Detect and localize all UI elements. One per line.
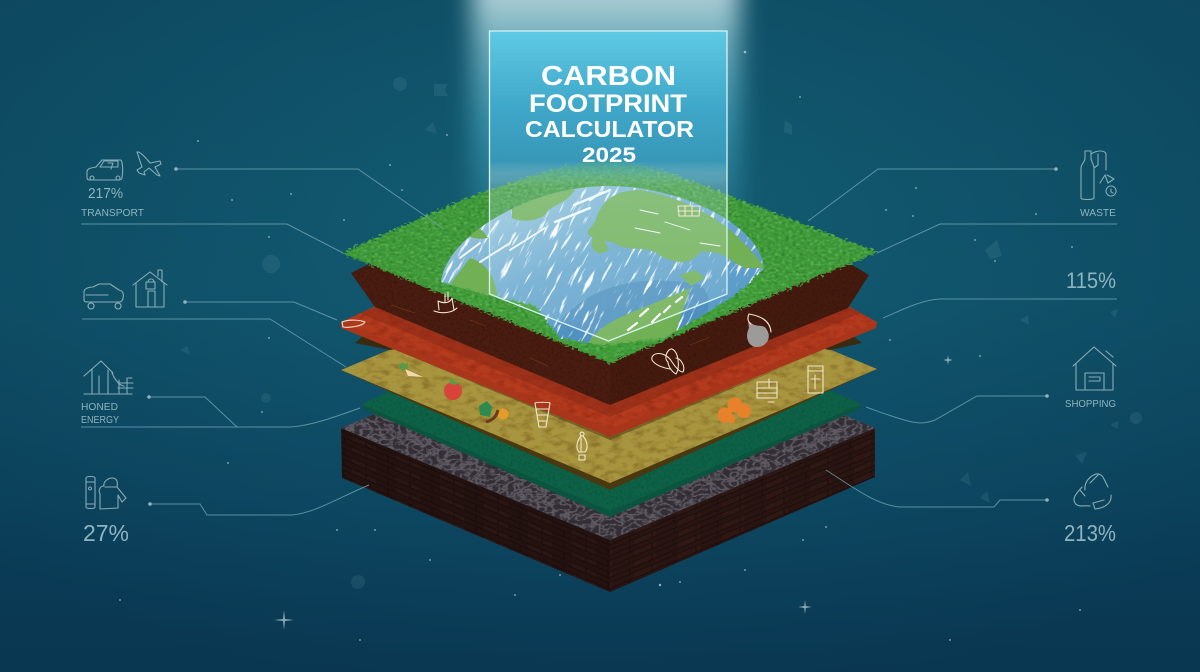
layer shadow — [355, 332, 862, 440]
icon: leaves and orange — [479, 401, 508, 422]
right: shopping — [1065, 347, 1116, 410]
globe — [441, 186, 764, 345]
icon: plane — [137, 152, 161, 176]
light beam — [472, 0, 740, 265]
title — [525, 60, 694, 167]
figure: 213%: 213% — [1064, 520, 1116, 546]
title: 2025 — [582, 144, 636, 167]
icon: car — [84, 284, 123, 309]
icon: house — [133, 270, 167, 307]
icon: oranges — [718, 398, 751, 424]
icon: bottles and clock — [1081, 151, 1116, 200]
left leader lines — [81, 167, 444, 515]
title: CALCULATOR — [525, 116, 694, 142]
label: honed energy: HONED — [81, 402, 118, 413]
layer: yellow food — [341, 258, 877, 490]
icon: home with pylons — [84, 361, 133, 394]
icon: sack — [747, 314, 771, 347]
title: FOOTPRINT — [529, 90, 687, 118]
icon: tablet — [808, 366, 823, 393]
layer icons — [342, 206, 823, 460]
layered carbon stack — [341, 158, 878, 592]
icon: tomato — [444, 378, 462, 400]
layer: brown soil — [351, 262, 869, 405]
icon: carrot — [398, 362, 423, 377]
icon: plate — [342, 320, 365, 327]
land masses — [441, 189, 765, 350]
icon: grid — [678, 206, 700, 216]
layer: red — [341, 300, 877, 437]
layer: green — [361, 296, 862, 517]
right leader lines — [808, 167, 1117, 507]
cloud streaks — [460, 190, 720, 330]
icon: loops — [652, 349, 684, 374]
layer: grass — [341, 160, 878, 363]
left: home energy — [81, 361, 133, 426]
figure: 217%: 217% — [88, 185, 123, 202]
title panel — [490, 31, 727, 341]
icon: recycle — [1074, 474, 1111, 509]
icon: bulb — [577, 432, 587, 460]
icon: bottle and person — [86, 476, 126, 509]
label: shopping: SHOPPING — [1065, 399, 1116, 410]
figure: 115%: 115% — [1066, 268, 1116, 293]
figure: 27%: 27% — [83, 520, 129, 546]
icon: screen — [757, 379, 777, 402]
grass tufts over globe — [441, 268, 772, 363]
icon: cup — [535, 402, 550, 427]
icon: house — [1073, 347, 1116, 390]
label: waste: WASTE — [1080, 208, 1116, 219]
icon: car — [87, 160, 123, 180]
title: CARBON — [541, 60, 676, 91]
clouds — [442, 186, 764, 345]
label: transport: TRANSPORT — [81, 208, 144, 219]
left: transport — [81, 152, 161, 219]
right: waste — [1080, 151, 1116, 219]
left: 27% — [83, 476, 129, 546]
layer: dark brick base — [341, 316, 875, 592]
icon: steaming cup — [434, 292, 457, 313]
label: honed energy: ENERGY — [81, 415, 119, 426]
right: 213% — [1064, 474, 1116, 546]
left: car and house icons — [84, 270, 167, 309]
